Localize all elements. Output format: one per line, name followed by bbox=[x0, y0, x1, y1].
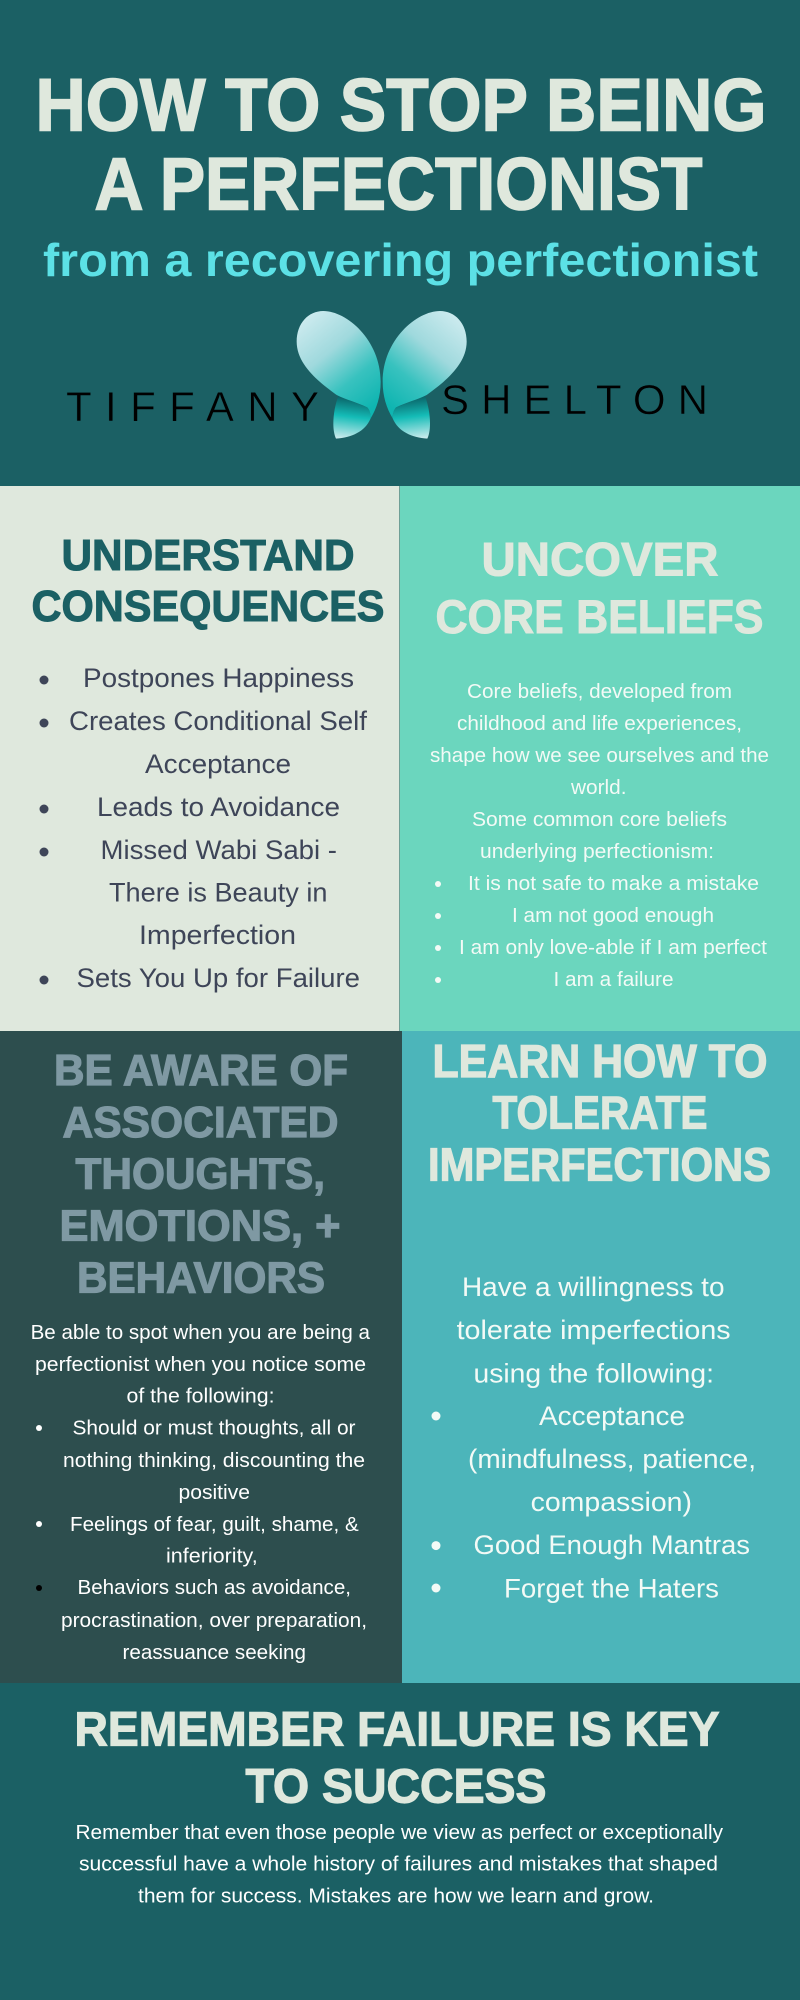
panel: header bbox=[0, 0, 800, 486]
logo wordmark: Shelton: SHELTON bbox=[441, 376, 708, 423]
heading: understand consequences: UNDERSTAND bbox=[62, 531, 354, 580]
heading: understand consequences bbox=[32, 531, 384, 631]
heading: remember failure is key to success: REMEMBER FAILURE IS KEY bbox=[74, 1704, 720, 1756]
text: willingness intro: using the following: bbox=[474, 1358, 714, 1388]
logo: Tiffany Shelton butterfly bbox=[66, 311, 708, 439]
list: signs of perfectionism: procrastination, over preparation, bbox=[61, 1610, 367, 1632]
logo wordmark: Tiffany: TIFFANY bbox=[66, 383, 319, 430]
list: consequences: Creates Conditional Self bbox=[69, 706, 367, 736]
heading: learn how to tolerate imperfections bbox=[428, 1035, 771, 1190]
list: consequences: Sets You Up for Failure bbox=[76, 963, 360, 993]
heading: remember failure is key to success: TO SUCCESS bbox=[246, 1760, 546, 1814]
heading: remember failure is key to success bbox=[74, 1704, 720, 1814]
list: signs of perfectionism: Should or must thoughts, all or bbox=[72, 1418, 356, 1440]
list: consequences: Leads to Avoidance bbox=[97, 792, 340, 822]
list: consequences bbox=[40, 663, 367, 993]
text: willingness intro bbox=[457, 1272, 731, 1388]
list: signs of perfectionism: reassuance seeking bbox=[122, 1642, 306, 1664]
list: signs of perfectionism: nothing thinking, discounting the bbox=[63, 1450, 365, 1472]
text: core beliefs intro: shape how we see ourselves and the bbox=[430, 745, 769, 767]
list: consequences: There is Beauty in bbox=[109, 878, 328, 908]
text: be aware intro: Be able to spot when you are being a bbox=[31, 1322, 371, 1344]
list: common core beliefs: I am only love-able if I am perfect bbox=[459, 937, 767, 959]
list: consequences: Missed Wabi Sabi - bbox=[100, 835, 337, 865]
heading: uncover core beliefs bbox=[436, 532, 764, 643]
heading: be aware of associated thoughts, emotions, behaviors: EMOTIONS, + bbox=[60, 1202, 340, 1250]
heading: understand consequences: CONSEQUENCES bbox=[32, 582, 384, 631]
heading: be aware of associated thoughts, emotions, behaviors: BEHAVIORS bbox=[77, 1254, 325, 1302]
text: core beliefs intro: Core beliefs, developed from bbox=[467, 681, 732, 703]
text: be aware intro: perfectionist when you notice some bbox=[35, 1354, 366, 1376]
title: HOW TO STOP BEING bbox=[36, 64, 766, 146]
heading: be aware of associated thoughts, emotions, behaviors bbox=[54, 1046, 348, 1302]
text: failure explanation: successful have a whole history of failures and mistakes that shaped bbox=[79, 1854, 718, 1876]
heading: be aware of associated thoughts, emotions, behaviors: BE AWARE OF bbox=[54, 1046, 348, 1095]
list: common core beliefs: It is not safe to make a mistake bbox=[468, 873, 759, 895]
panel: uncover core beliefs bbox=[399, 486, 800, 1031]
icon: butterfly bbox=[297, 311, 467, 439]
list: consequences: Acceptance bbox=[145, 749, 291, 779]
panel: tolerate imperfections bbox=[402, 1031, 800, 1683]
subtitle: from a recovering perfectionist bbox=[43, 234, 758, 286]
text: failure explanation: them for success. Mistakes are how we learn and grow. bbox=[138, 1886, 654, 1908]
list: tolerance tools: Forget the Haters bbox=[504, 1574, 719, 1604]
text: willingness intro: tolerate imperfections bbox=[457, 1315, 731, 1345]
text: core beliefs intro: underlying perfectionism: bbox=[480, 841, 714, 863]
list: tolerance tools: Good Enough Mantras bbox=[474, 1530, 750, 1560]
list: tolerance tools: Acceptance bbox=[539, 1401, 685, 1431]
heading: be aware of associated thoughts, emotions, behaviors: ASSOCIATED bbox=[62, 1098, 338, 1147]
text: failure explanation bbox=[76, 1822, 723, 1908]
list: common core beliefs bbox=[435, 873, 767, 991]
list: tolerance tools: (mindfulness, patience, bbox=[468, 1444, 756, 1474]
text: core beliefs intro: childhood and life experiences, bbox=[457, 713, 742, 735]
heading: learn how to tolerate imperfections: TOLERATE bbox=[492, 1086, 708, 1138]
text: be aware intro: of the following: bbox=[126, 1386, 274, 1408]
heading: learn how to tolerate imperfections: IMPERFECTIONS bbox=[428, 1138, 771, 1190]
list: consequences: Postpones Happiness bbox=[83, 663, 354, 693]
heading: be aware of associated thoughts, emotions, behaviors: THOUGHTS, bbox=[76, 1150, 325, 1198]
heading: learn how to tolerate imperfections: LEARN HOW TO bbox=[432, 1035, 768, 1087]
list: signs of perfectionism: Behaviors such as avoidance, bbox=[78, 1577, 351, 1599]
list: signs of perfectionism: Feelings of fear, guilt, shame, & bbox=[70, 1514, 359, 1536]
heading: uncover core beliefs: UNCOVER bbox=[482, 532, 718, 586]
text: core beliefs intro: Some common core beliefs bbox=[472, 809, 727, 831]
title bbox=[36, 64, 766, 226]
list: common core beliefs: I am a failure bbox=[554, 969, 674, 991]
list: signs of perfectionism bbox=[36, 1418, 367, 1664]
text: core beliefs intro bbox=[430, 681, 769, 863]
text: be aware intro bbox=[31, 1322, 371, 1408]
text: failure explanation: Remember that even those people we view as perfect or exceptionally bbox=[76, 1822, 723, 1844]
list: tolerance tools: compassion) bbox=[531, 1487, 692, 1517]
list: common core beliefs: I am not good enough bbox=[512, 905, 714, 927]
list: consequences: Imperfection bbox=[139, 920, 296, 950]
heading: uncover core beliefs: CORE BELIEFS bbox=[436, 590, 764, 643]
list: signs of perfectionism: inferiority, bbox=[166, 1546, 258, 1568]
panel: be aware bbox=[0, 1031, 402, 1683]
panel: understand consequences bbox=[0, 486, 400, 1031]
text: willingness intro: Have a willingness to bbox=[462, 1272, 724, 1302]
list: signs of perfectionism: positive bbox=[178, 1482, 250, 1504]
title: A PERFECTIONIST bbox=[94, 142, 702, 226]
panel: failure is key bbox=[0, 1683, 800, 2000]
text: core beliefs intro: world. bbox=[570, 777, 626, 799]
list: tolerance tools bbox=[432, 1401, 756, 1604]
